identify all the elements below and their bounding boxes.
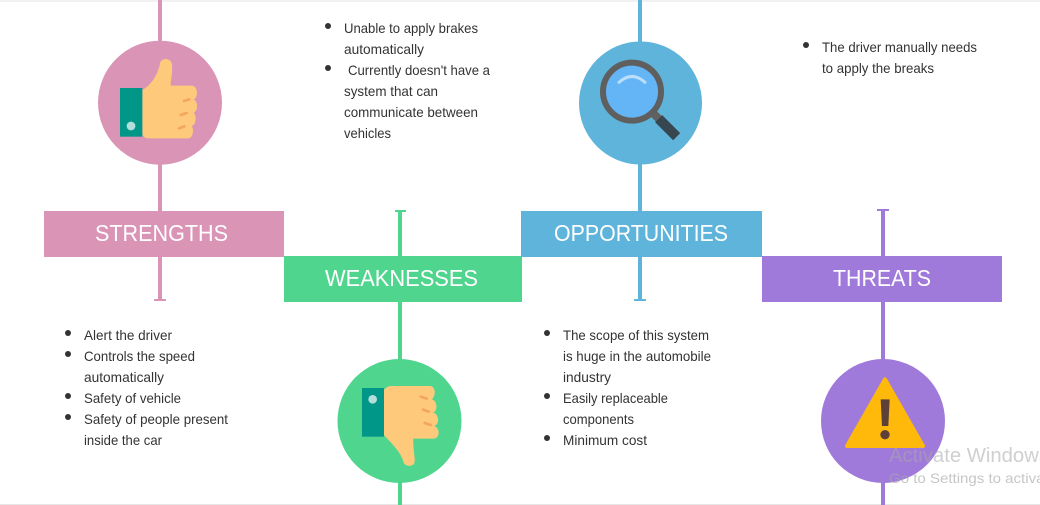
text block: weaknesses list: communicate between <box>344 104 478 120</box>
connector line: opportunities <box>634 0 646 301</box>
heading: strengths <box>44 211 284 257</box>
heading: opportunities: OPPORTUNITIES <box>554 220 728 246</box>
watermark: activate windows <box>889 445 1040 486</box>
icon: warning triangle <box>821 359 945 483</box>
panel: opportunities <box>521 0 762 448</box>
text block: weaknesses list: Unable to apply brakes <box>344 20 478 36</box>
text block: strengths list: Safety of people present <box>84 411 228 427</box>
panel: threats <box>762 39 1002 505</box>
text block: opportunities list: The scope of this system <box>563 327 709 343</box>
text block: opportunities list: is huge in the automobile <box>563 348 711 364</box>
heading: weaknesses <box>284 256 522 302</box>
text block: opportunities list: Minimum cost <box>563 432 647 448</box>
panel: strengths <box>44 0 284 448</box>
text block: opportunities list: components <box>563 411 634 427</box>
text block: opportunities list <box>544 327 711 448</box>
heading: threats <box>762 256 1002 302</box>
text block: strengths list: inside the car <box>84 432 162 448</box>
heading: threats: THREATS <box>833 265 931 291</box>
text block: opportunities list: industry <box>563 369 611 385</box>
text block: weaknesses list: system that can <box>344 83 438 99</box>
text block: weaknesses list <box>325 20 490 141</box>
text block: strengths list <box>65 327 228 448</box>
heading: strengths: STRENGTHS <box>95 220 228 246</box>
heading: weaknesses: WEAKNESSES <box>325 265 478 291</box>
icon: thumbs down <box>338 359 462 483</box>
text block: threats list: to apply the breaks <box>822 60 934 76</box>
text block: threats list: The driver manually needs <box>822 39 977 55</box>
connector line: threats <box>877 209 889 505</box>
connector line: weaknesses <box>395 210 406 505</box>
text block: weaknesses list: automatically <box>344 41 424 57</box>
text block: strengths list: Alert the driver <box>84 327 172 343</box>
icon: thumbs up <box>98 41 222 165</box>
text block: threats list <box>803 39 977 76</box>
text block: strengths list: Controls the speed <box>84 348 195 364</box>
text block: weaknesses list: vehicles <box>344 125 391 141</box>
text block: strengths list: Safety of vehicle <box>84 390 181 406</box>
panel: weaknesses <box>284 20 522 505</box>
text block: opportunities list: Easily replaceable <box>563 390 668 406</box>
text block: strengths list: automatically <box>84 369 164 385</box>
heading: opportunities <box>521 211 762 257</box>
connector line: strengths <box>154 0 166 301</box>
icon: magnifying glass <box>579 42 702 164</box>
text block: weaknesses list: Currently doesn't have a <box>348 62 490 78</box>
